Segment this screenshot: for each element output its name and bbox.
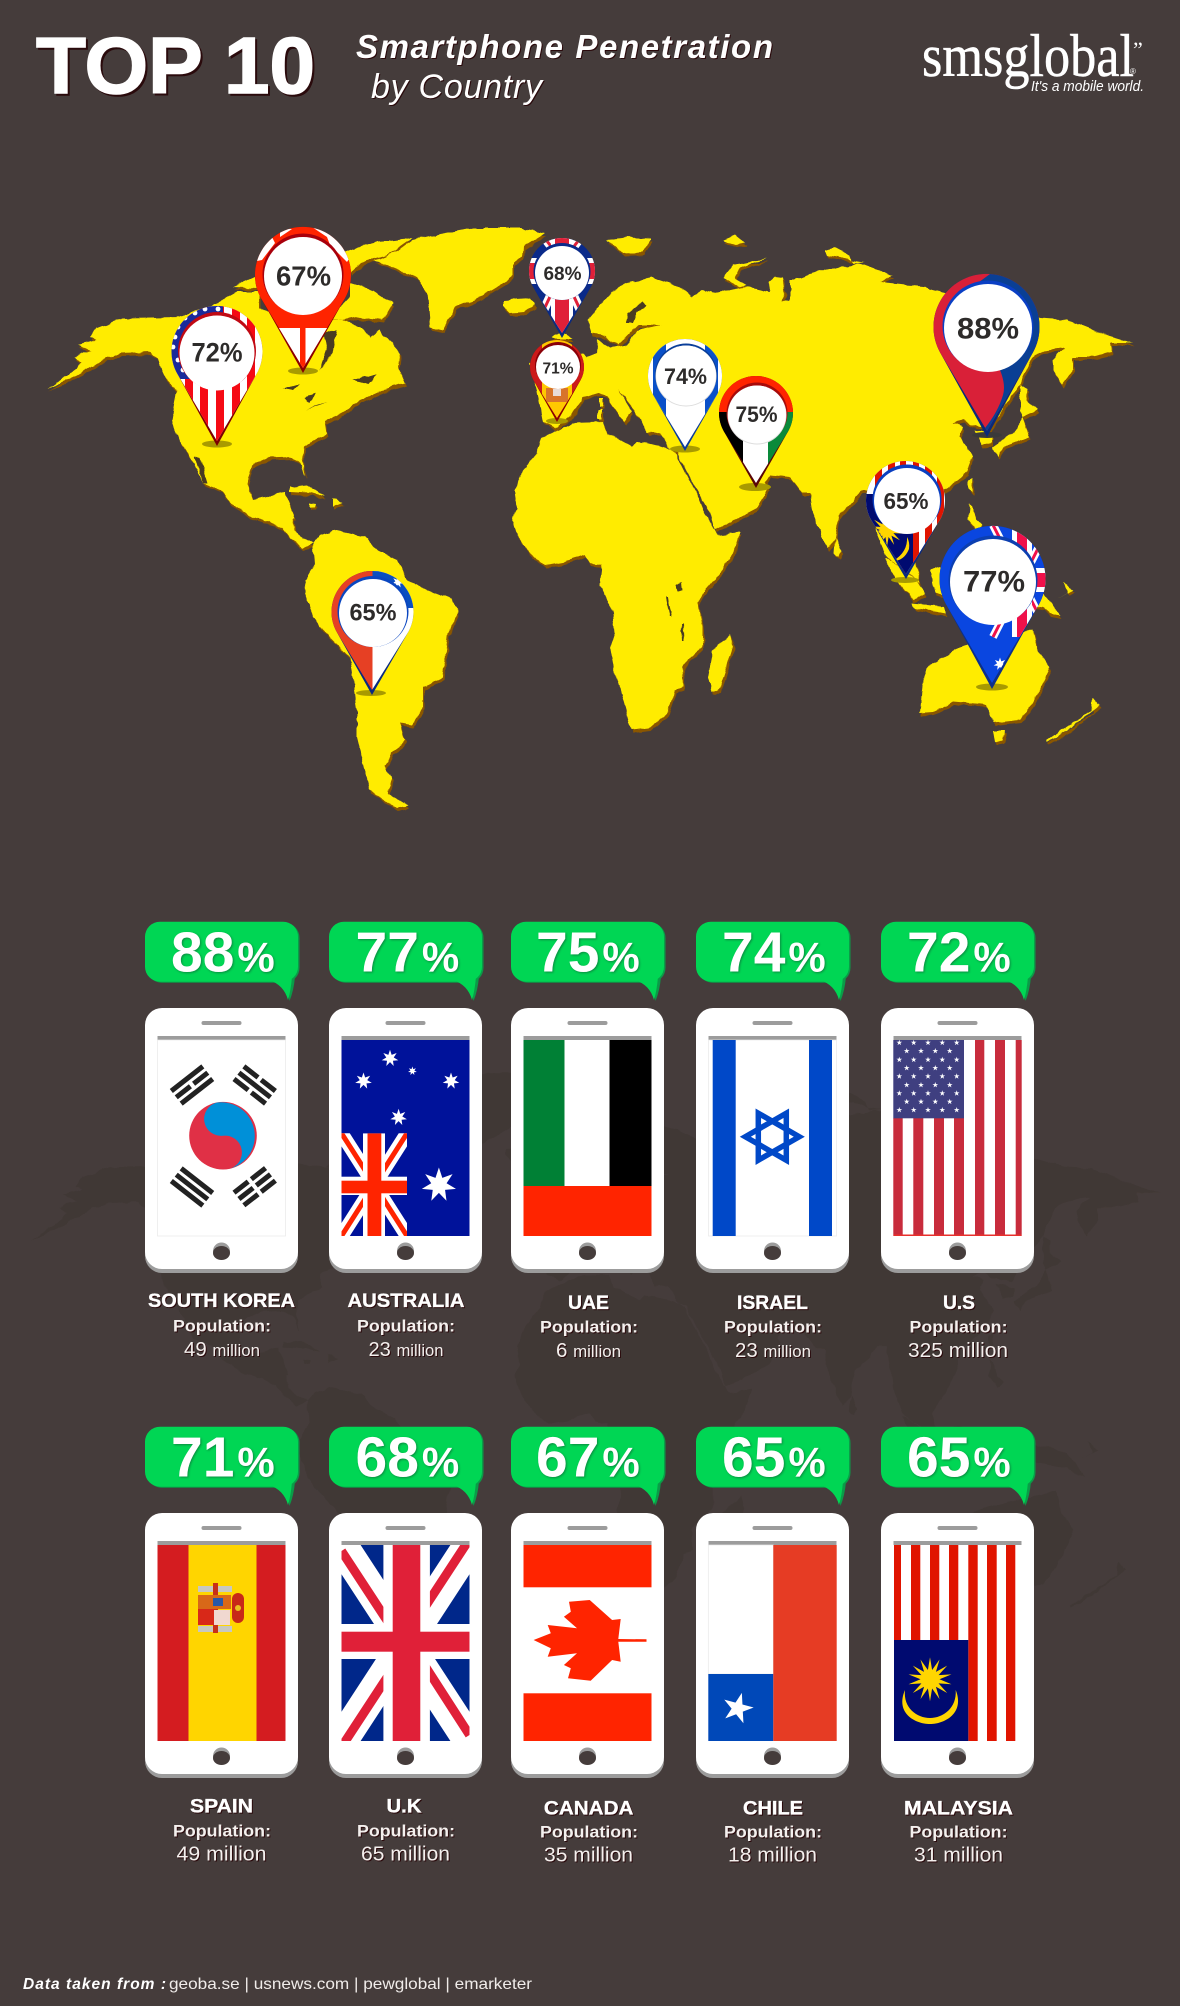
- label: U.K population: 65 million: [361, 1844, 450, 1866]
- speech bubble: 72%: 72%: [907, 921, 1011, 985]
- card: South Korea: [145, 921, 300, 1361]
- speech bubble: 65%: 65%: [722, 1426, 826, 1490]
- label: Spain population: Population:: [173, 1822, 271, 1841]
- speech bubble: 74%: [696, 921, 850, 1001]
- speech bubble: 75%: [511, 921, 666, 1001]
- pin: Malaysia 65%: 65%: [884, 488, 928, 514]
- speech bubble: 88%: 88%: [171, 921, 275, 985]
- pin: Australia 77%: 77%: [963, 566, 1025, 599]
- speech bubble: 67%: 67%: [536, 1426, 640, 1490]
- footer: data sources: geoba.se | usnews.com | pewglobal | emarketer: [169, 1976, 533, 1993]
- label: South Korea population: SOUTH KOREA: [148, 1291, 295, 1312]
- label: Chile population: CHILE: [743, 1798, 803, 1819]
- phone with Israel flag: [696, 1008, 849, 1273]
- label: UAE population: 6 million: [556, 1340, 621, 1362]
- label: Australia population: [348, 1291, 465, 1361]
- label: Spain population: 49 million: [176, 1844, 266, 1866]
- speech bubble: 68%: 68%: [356, 1426, 459, 1490]
- pin: U.S 72%: [172, 306, 262, 448]
- pin: UAE 75%: [719, 376, 793, 491]
- card: Spain: [145, 1426, 300, 1866]
- label: UAE population: [540, 1293, 638, 1362]
- label: Chile population: Population:: [724, 1823, 822, 1842]
- label: U.S population: 325 million: [908, 1340, 1008, 1362]
- card: Malaysia: [881, 1426, 1036, 1867]
- label: Spain population: [173, 1797, 271, 1866]
- speech bubble: 77%: 77%: [356, 921, 459, 985]
- card: Australia: [329, 921, 484, 1361]
- label: Chile population: 18 million: [728, 1845, 817, 1867]
- pin: U.K 68%: 68%: [544, 263, 582, 285]
- card: UAE: [511, 921, 666, 1362]
- card: Chile: [696, 1426, 850, 1867]
- logo: smsglobal: ”: [1133, 37, 1143, 62]
- label: UAE population: Population:: [540, 1318, 638, 1337]
- pin: Israel 74%: [648, 339, 722, 452]
- label: Australia population: AUSTRALIA: [348, 1291, 465, 1312]
- phone with Chile flag: [696, 1513, 849, 1778]
- label: Malaysia population: MALAYSIA: [904, 1798, 1013, 1819]
- label: Australia population: 23 million: [368, 1339, 444, 1361]
- speech bubble: 65%: [881, 1426, 1036, 1506]
- pin: U.K 68%: [529, 238, 595, 338]
- label: Israel population: [724, 1293, 822, 1362]
- card: Canada: [511, 1426, 666, 1867]
- label: Israel population: 23 million: [735, 1340, 811, 1362]
- label: U.S population: U.S: [943, 1293, 975, 1314]
- subtitle: by Country: [371, 68, 544, 106]
- subtitle: Smartphone Penetration: [356, 28, 773, 65]
- speech bubble: 68%: [329, 1426, 484, 1506]
- pin: UAE 75%: 75%: [736, 402, 778, 427]
- label: Spain population: SPAIN: [190, 1797, 253, 1818]
- label: Australia population: Population:: [357, 1317, 455, 1336]
- card: U.K: [329, 1426, 484, 1866]
- phone with Malaysia flag: [881, 1513, 1034, 1778]
- phone with South Korea flag: [145, 1008, 298, 1273]
- speech bubble: 67%: [511, 1426, 666, 1506]
- pin: Israel 74%: 74%: [664, 364, 707, 389]
- pin: Spain 71%: 71%: [542, 360, 574, 377]
- label: U.S population: [908, 1293, 1008, 1362]
- label: Canada population: 35 million: [544, 1845, 633, 1867]
- speech bubble: 74%: 74%: [722, 921, 826, 985]
- label: Israel population: Population:: [724, 1318, 822, 1337]
- footer: data sources: Data taken from :: [23, 1976, 166, 1993]
- label: U.K population: U.K: [386, 1797, 422, 1818]
- speech bubble: 77%: [329, 921, 484, 1001]
- label: U.K population: [357, 1797, 455, 1866]
- card: Israel: [696, 921, 850, 1362]
- speech bubble: 75%: 75%: [536, 921, 640, 985]
- footer: data sources: [23, 1976, 533, 1993]
- logo: smsglobal: smsglobal: [922, 23, 1134, 89]
- speech bubble: 65%: 65%: [907, 1426, 1011, 1490]
- label: Canada population: CANADA: [544, 1798, 634, 1819]
- phone with Australia flag: [329, 1008, 482, 1273]
- logo: smsglobal: ®: [1130, 67, 1136, 76]
- phone with U.S flag: [881, 1008, 1034, 1273]
- pin: U.S 72%: 72%: [192, 338, 242, 368]
- label: Canada population: Population:: [540, 1823, 638, 1842]
- label: Malaysia population: Population:: [910, 1823, 1007, 1842]
- speech bubble: 65%: [696, 1426, 850, 1506]
- label: Chile population: [724, 1798, 822, 1867]
- label: Malaysia population: 31 million: [914, 1845, 1003, 1867]
- speech bubble: 88%: [145, 921, 300, 1001]
- phone with Canada flag: [511, 1513, 664, 1778]
- pin: Spain 71%: [530, 340, 584, 424]
- world map: [47, 228, 1134, 811]
- speech bubble: 71%: [145, 1426, 300, 1506]
- subtitle: [356, 28, 773, 106]
- faint background world map: [31, 1073, 1160, 1676]
- card: U.S: [881, 921, 1036, 1362]
- logo: smsglobal: It's a mobile world.: [1031, 78, 1144, 95]
- label: South Korea population: Population:: [173, 1317, 271, 1336]
- pin: Canada 67%: 67%: [276, 261, 331, 292]
- pin: South Korea 88%: [934, 274, 1040, 438]
- speech bubble: 72%: [881, 921, 1036, 1001]
- pin: South Korea 88%: 88%: [957, 312, 1019, 345]
- phone with U.K flag: [329, 1513, 482, 1778]
- label: South Korea population: 49 million: [184, 1339, 260, 1361]
- phone with Spain flag: [145, 1513, 298, 1778]
- pin: Chile 65%: 65%: [350, 600, 396, 627]
- label: South Korea population: [148, 1291, 295, 1361]
- pin: Chile 65%: [332, 571, 414, 696]
- title: TOP 10: [36, 21, 315, 110]
- phone with UAE flag: [511, 1008, 664, 1273]
- label: UAE population: UAE: [568, 1293, 609, 1314]
- label: Malaysia population: [904, 1798, 1013, 1867]
- pin: Australia 77%: [940, 526, 1046, 690]
- pin: Malaysia 65%: [866, 461, 945, 583]
- label: Canada population: [540, 1798, 638, 1867]
- label: U.S population: Population:: [910, 1318, 1007, 1337]
- speech bubble: 71%: 71%: [171, 1426, 275, 1490]
- pin: Canada 67%: [255, 226, 351, 374]
- label: U.K population: Population:: [357, 1822, 455, 1841]
- label: Israel population: ISRAEL: [737, 1293, 808, 1314]
